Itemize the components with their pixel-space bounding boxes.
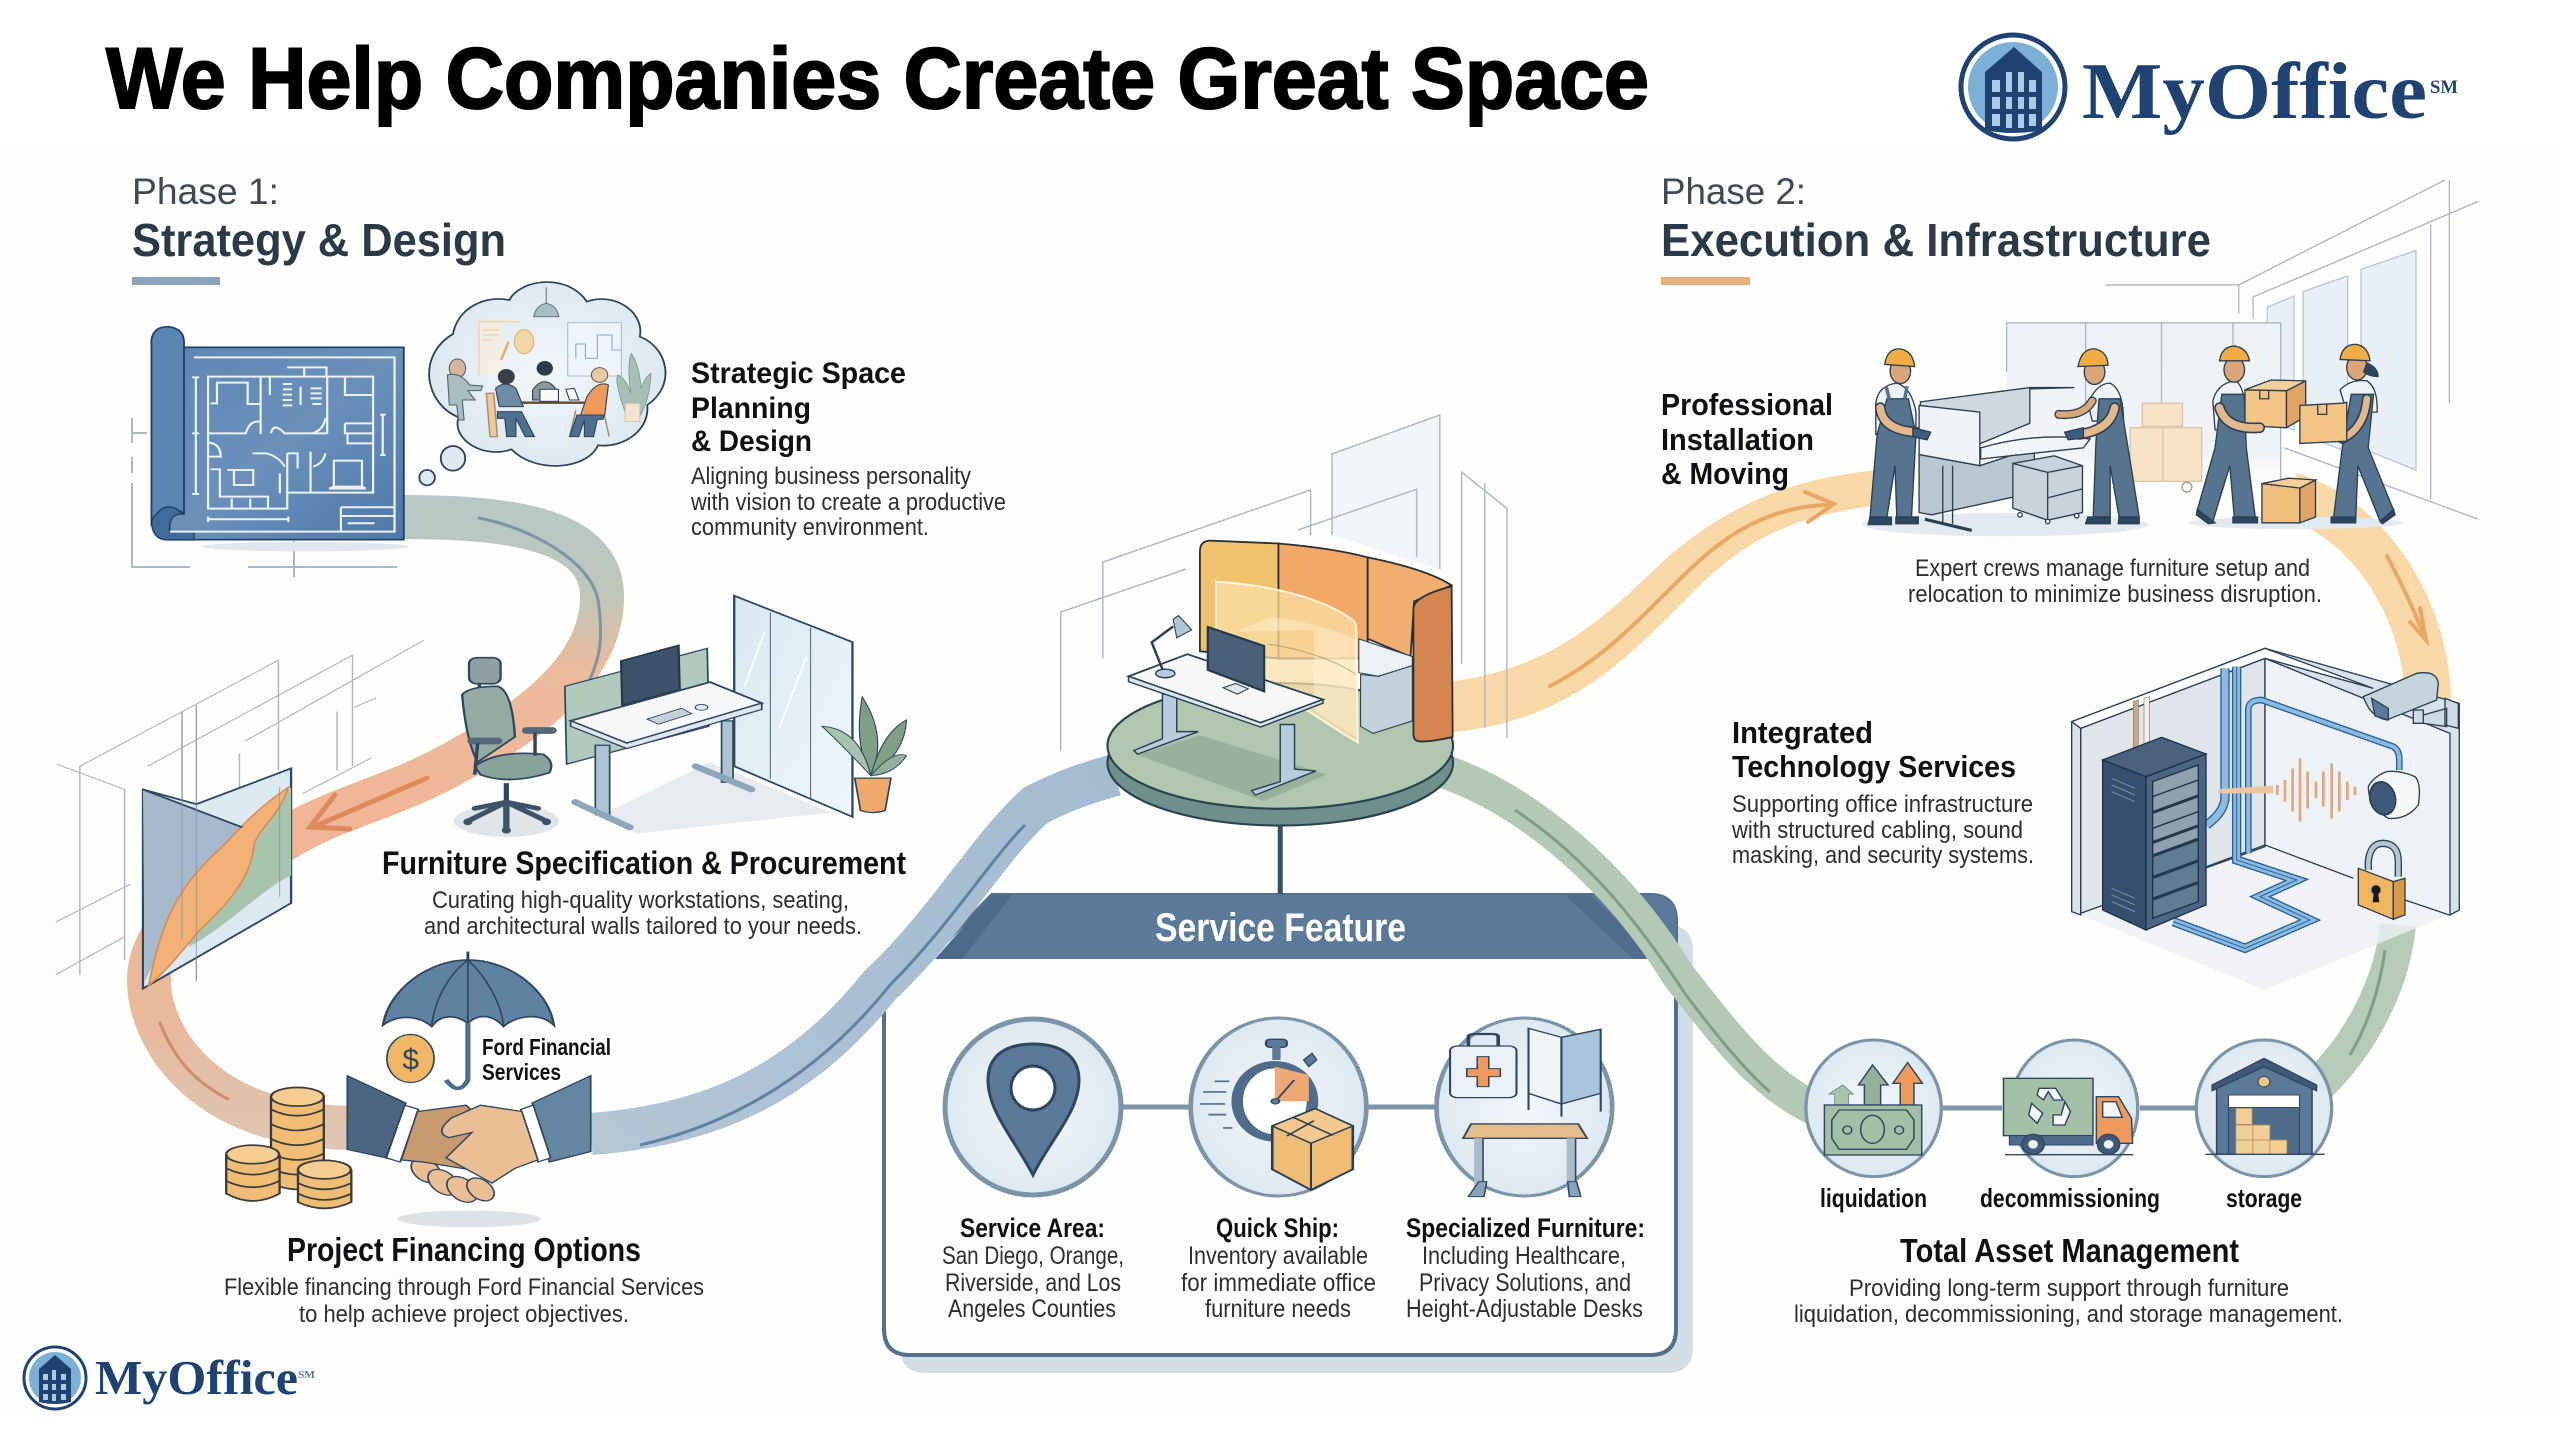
text: quick ship: Quick Ship: <box>1216 1213 1339 1243</box>
text: quick ship: for immediate office <box>1181 1269 1376 1297</box>
ribbon: central pod to asset management <box>1440 770 1822 1112</box>
text: project financing: Flexible financing through Ford Financial Services <box>224 1274 704 1301</box>
walls <box>2081 658 2265 913</box>
logo: MyOffice header <box>1961 35 2458 139</box>
phase 2 heading: Phase 2: <box>1661 171 1806 212</box>
text: integrated technology: masking, and security systems. <box>1732 842 2034 869</box>
text: integrated technology: Supporting office infrastructure <box>1732 791 2033 818</box>
icon: quick ship stopwatch <box>1191 1018 1366 1196</box>
text: furniture specification <box>382 845 906 940</box>
speaker <box>2368 771 2419 818</box>
text: integrated technology <box>1731 715 2034 869</box>
text: service area <box>942 1213 1124 1323</box>
icon: service area pin <box>945 1019 1121 1195</box>
text: asset icon labels: storage <box>2226 1183 2302 1213</box>
wireframe lines <box>1061 415 1507 751</box>
chair <box>469 658 501 684</box>
plant <box>859 697 878 776</box>
text: quick ship: Inventory available <box>1188 1242 1368 1270</box>
title: We Help Companies Create Great Space <box>106 31 1649 127</box>
icon: liquidation <box>1806 1040 1941 1177</box>
dollar coin <box>387 1034 434 1082</box>
text: expert crews <box>1908 555 2322 608</box>
logo: MyOffice footer: MyOffice <box>95 1350 298 1405</box>
text: service area: San Diego, Orange, <box>942 1242 1124 1270</box>
text: quick ship: furniture needs <box>1205 1295 1351 1323</box>
text: ford financial services: Ford Financial <box>482 1034 611 1060</box>
screen <box>565 648 709 764</box>
umbrella <box>465 952 470 960</box>
text: total asset management <box>1794 1232 2343 1328</box>
ribbon accents: phase 1 <box>160 518 601 1099</box>
text: ford financial services: Services <box>482 1059 561 1085</box>
beige conduit <box>2133 700 2138 750</box>
handshake <box>347 1076 406 1158</box>
connector lines: asset icons <box>1943 1106 2196 1110</box>
text: furniture specification: Curating high-quality workstations, seating, <box>432 887 849 914</box>
window frames <box>2106 180 2478 519</box>
text: integrated technology: Technology Services <box>1732 749 2016 784</box>
illustration: technology room <box>2072 648 2459 990</box>
text: project financing: Project Financing Options <box>287 1231 641 1268</box>
text: furniture specification: Furniture Specification & Procurement <box>382 845 906 881</box>
worker 3 <box>2196 346 2257 524</box>
text: specialized furniture: Height-Adjustable Desks <box>1406 1295 1643 1323</box>
floor <box>2072 847 2457 990</box>
desk legs <box>1134 694 1198 754</box>
text: service area: Angeles Counties <box>948 1295 1116 1323</box>
text: ford financial services <box>482 1034 611 1085</box>
ribbon arrow: to technology <box>2387 556 2426 640</box>
icon: decommissioning truck <box>2003 1040 2138 1177</box>
text: service area: Riverside, and Los <box>945 1269 1121 1297</box>
text: furniture specification: and architectural walls tailored to your needs. <box>424 913 862 940</box>
phase 2 heading: Execution & Infrastructure <box>1661 214 2211 266</box>
floor box <box>2262 478 2316 523</box>
carried boxes <box>2245 380 2347 443</box>
desk <box>571 682 762 743</box>
desk <box>1129 654 1323 723</box>
text: specialized furniture: Specialized Furniture: <box>1406 1213 1645 1243</box>
text: strategic space planning: Strategic Space <box>691 357 906 390</box>
monitor <box>1208 627 1264 691</box>
worker 2 <box>2059 349 2139 524</box>
back wall <box>2007 323 2281 488</box>
shadows <box>397 1210 541 1227</box>
curved screen <box>1200 541 1278 658</box>
panel: service feature <box>884 895 1693 1373</box>
phase 1 heading: Phase 1: <box>132 171 279 212</box>
connector lines <box>1122 1104 1435 1110</box>
text: total asset management: Total Asset Management <box>1900 1232 2239 1269</box>
text: asset icon labels: decommissioning <box>1980 1183 2160 1213</box>
text: professional installation: Professional <box>1661 387 1833 422</box>
sound wave <box>2218 786 2273 793</box>
worker 4 <box>2331 344 2395 524</box>
text: integrated technology: with structured cabling, sound <box>1731 817 2023 844</box>
text: expert crews: Expert crews manage furniture setup and <box>1915 555 2310 582</box>
illustration: financing handshake, umbrella and coins <box>226 952 591 1227</box>
text: integrated technology: Integrated <box>1732 715 1873 750</box>
phase 2 heading <box>1661 171 2211 285</box>
text: strategic space planning <box>690 357 1006 541</box>
cart boxes <box>2130 403 2202 492</box>
illustration: thought bubble with meeting <box>419 282 666 485</box>
ribbon: financing to central pod <box>591 775 1115 1145</box>
text: total asset management: liquidation, decommissioning, and storage management. <box>1794 1301 2343 1328</box>
monitor <box>621 645 680 705</box>
illustration: blueprint <box>151 327 409 551</box>
text: asset icon labels: liquidation <box>1820 1183 1927 1213</box>
text: strategic space planning: & Design <box>691 425 812 458</box>
blue cabling <box>2173 667 2399 948</box>
faint architecture lines: blueprint drafting <box>132 418 397 577</box>
text: professional installation <box>1661 387 1833 491</box>
faint architecture lines: left <box>56 640 424 981</box>
text: strategic space planning: community environment. <box>691 514 929 541</box>
logo: MyOffice header: MyOffice <box>2082 48 2427 136</box>
worker 3 arm <box>2220 408 2260 428</box>
panel header band <box>935 895 1676 959</box>
camera <box>2363 673 2438 720</box>
phase 1 heading <box>132 171 506 285</box>
illustration: performance chart panel <box>143 705 291 989</box>
text: project financing: to help achieve project objectives. <box>299 1301 629 1328</box>
ribbon arrow: to installation <box>1550 492 1834 686</box>
text: service area: Service Area: <box>960 1213 1105 1243</box>
illustration: central pod workstation <box>1061 415 1507 894</box>
worker 1 <box>1868 349 1931 525</box>
illustration: financing handshake, umbrella and coins: $ <box>402 1043 419 1076</box>
text: expert crews: relocation to minimize business disruption. <box>1908 581 2322 608</box>
icon: specialized furniture <box>1436 1018 1612 1197</box>
text: specialized furniture: Privacy Solutions, and <box>1419 1269 1631 1297</box>
text: strategic space planning: Aligning business personality <box>691 463 971 490</box>
glass wall <box>734 596 852 817</box>
logo: MyOffice footer <box>24 1347 316 1409</box>
ribbon: central pod to installation <box>1440 470 1880 733</box>
coin stacks <box>226 1088 351 1208</box>
logo: MyOffice header: SM <box>2430 77 2458 98</box>
text: total asset management: Providing long-term support through furniture <box>1849 1275 2289 1302</box>
text: specialized furniture: Including Healthcare, <box>1422 1242 1626 1270</box>
logo: MyOffice footer: SM <box>298 1369 316 1381</box>
workstation <box>1919 388 2090 530</box>
end panel <box>1413 586 1453 741</box>
server rack <box>2103 737 2206 930</box>
sofa <box>1359 639 1412 676</box>
stem <box>1278 826 1283 894</box>
shadow <box>607 762 831 834</box>
floor shadows <box>1862 513 2148 536</box>
text: specialized furniture <box>1406 1213 1645 1323</box>
icon: storage warehouse <box>2196 1040 2332 1177</box>
glass partition <box>1216 582 1358 742</box>
text: professional installation: & Moving <box>1661 456 1789 491</box>
text: strategic space planning: Planning <box>691 392 811 425</box>
text: strategic space planning: with vision to create a productive <box>690 489 1006 516</box>
text: project financing <box>224 1231 704 1328</box>
text: quick ship <box>1181 1213 1376 1323</box>
text: asset icon labels <box>1820 1183 2302 1213</box>
phase 1 heading: Strategy & Design <box>132 214 506 266</box>
ribbon: blueprint to financing <box>149 517 602 1128</box>
illustration: furniture workstation <box>454 596 906 837</box>
text: professional installation: Installation <box>1661 422 1814 457</box>
platform <box>1107 700 1453 826</box>
ribbon: installation to technology <box>2290 495 2428 705</box>
ribbon: technology to storage <box>2318 925 2398 1085</box>
lamp <box>1156 669 1175 678</box>
panel title: Service Feature <box>1155 906 1406 950</box>
illustration: installation crew <box>1862 180 2478 536</box>
lock <box>2368 843 2398 877</box>
